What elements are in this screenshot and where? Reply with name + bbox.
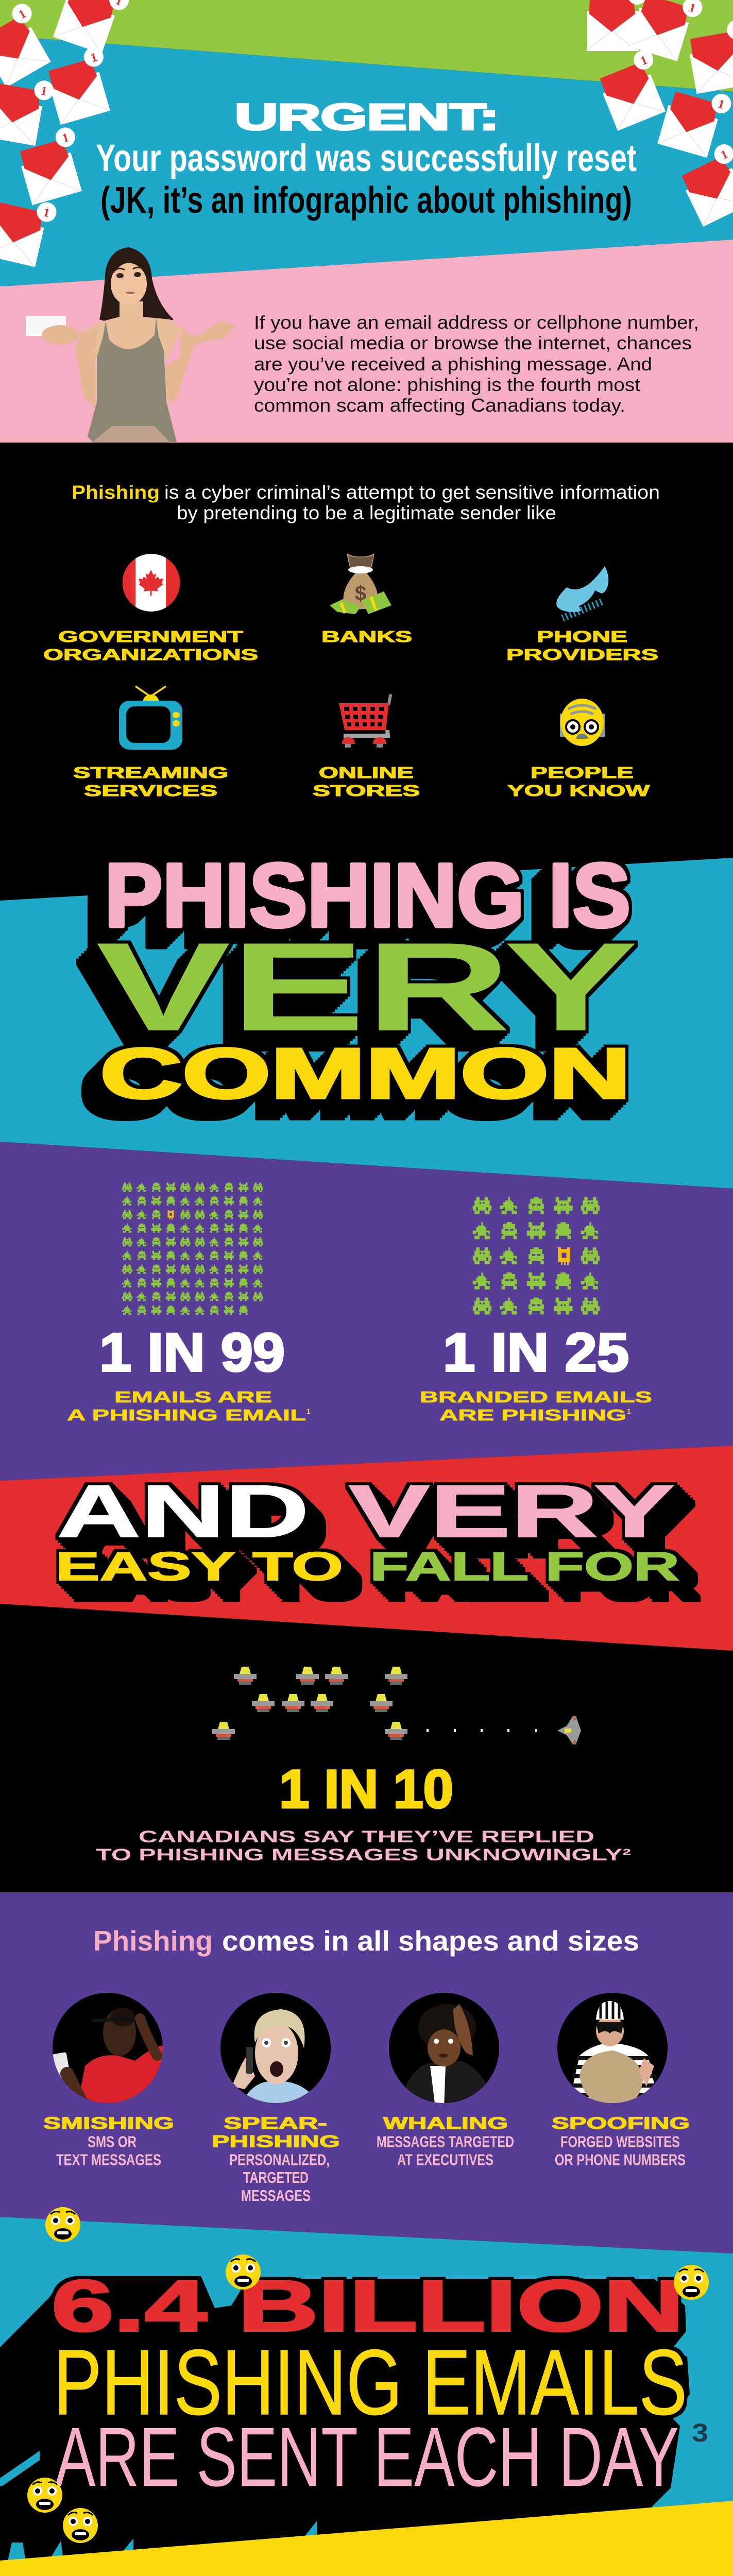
label: spoofing: SPOOFING — [552, 2114, 690, 2132]
panel: don't take the bait — [0, 2501, 733, 2576]
icon: television — [119, 686, 182, 750]
label: online stores: ONLINE — [319, 764, 414, 782]
label: spear-phishing — [212, 2114, 340, 2205]
caption: branded emails are phishing: BRANDED EMAILS — [420, 1388, 652, 1406]
heading: phishing definition: by pretending to be a legitimate sender like — [177, 502, 556, 523]
photo: smishing person — [52, 1993, 165, 2110]
icon: envelopes with notification badges: 1 — [42, 206, 51, 221]
title: URGENT: — [235, 97, 499, 138]
icon: money bag — [330, 553, 391, 614]
shadow behind headline — [0, 2276, 690, 2576]
heading: phishing comes in all shapes and sizes: Phishing — [93, 1925, 213, 1957]
heading: and very easy to fall for: EASY TO — [56, 1544, 343, 1589]
label: smishing: TEXT MESSAGES — [56, 2150, 161, 2169]
icon: surprised emoji — [45, 2207, 80, 2242]
icon: older man emoji — [560, 699, 605, 746]
icon: envelopes with notification badges: 1 — [16, 7, 28, 22]
label: whaling: AT EXECUTIVES — [397, 2150, 493, 2169]
icon: surprised emoji — [674, 2265, 709, 2300]
icon: surprised emoji — [226, 2255, 261, 2290]
text block: intro: are you’ve received a phishing message. And — [254, 353, 652, 375]
caption: emails are a phishing email: EMAILS ARE — [114, 1388, 272, 1406]
caption: branded emails are phishing: ARE PHISHING — [439, 1406, 626, 1424]
caption: branded emails are phishing — [420, 1388, 652, 1424]
panel: statistics — [0, 1142, 733, 1481]
heading: 6.4 billion phishing emails: 3 — [692, 2418, 708, 2447]
text block: intro: you’re not alone: phishing is the fourth most — [254, 374, 640, 395]
text block: intro — [254, 312, 699, 416]
icon: telephone handset — [556, 566, 608, 618]
heading: 6.4 billion phishing emails — [52, 2265, 708, 2504]
text block: intro: common scam affecting Canadians today. — [254, 395, 625, 416]
label: people you know — [507, 764, 650, 800]
caption: branded emails are phishing: 1 — [627, 1407, 631, 1415]
icon: envelopes with notification badges: 1 — [639, 54, 649, 68]
icon: woman shrugging with phone — [26, 247, 235, 443]
caption: emails are a phishing email: A PHISHING EMAIL — [67, 1406, 306, 1424]
label: online stores: STORES — [313, 782, 420, 800]
title — [96, 97, 637, 221]
label: government organizations: ORGANIZATIONS — [43, 646, 258, 664]
icon: envelopes with notification badges: 1 — [89, 50, 99, 65]
heading: 6.4 billion phishing emails: 6.4 BILLION — [52, 2265, 684, 2346]
heading: phishing definition: is a cyber criminal’s attempt to get sensitive information — [164, 482, 660, 503]
label: government organizations: GOVERNMENT — [58, 628, 243, 646]
label: people you know: PEOPLE — [531, 764, 634, 782]
heading: phishing is: PHISHING IS — [105, 845, 630, 946]
label: smishing: SMS OR — [88, 2133, 137, 2150]
label: streaming services: STREAMING — [73, 764, 228, 782]
panel: phishing is very common — [0, 845, 733, 1189]
icon: surprised emoji — [27, 2478, 62, 2513]
label: banks: BANKS — [321, 628, 412, 646]
panel: hero — [0, 0, 733, 443]
label: spoofing: FORGED WEBSITES — [560, 2133, 680, 2150]
label: phone providers — [506, 628, 658, 664]
heading: and very easy to fall for — [56, 1470, 679, 1589]
panel: 1 in 10 — [0, 1604, 733, 1892]
caption: canadians replied — [96, 1827, 631, 1864]
label: whaling: MESSAGES TARGETED — [377, 2133, 514, 2150]
icon: envelopes with notification badges: 1 — [717, 97, 726, 112]
chart: 1 in 25 invaders — [469, 1193, 604, 1319]
caption: canadians replied: CANADIANS SAY THEY’VE REPLIED — [139, 1827, 594, 1846]
label: spear-phishing: PHISHING — [212, 2132, 340, 2150]
caption: emails are a phishing email — [67, 1388, 311, 1424]
label: whaling — [377, 2114, 514, 2169]
label: spear-phishing: TARGETED — [243, 2168, 309, 2187]
icon: envelopes with notification badges: 1 — [687, 1, 697, 15]
text block: intro: If you have an email address or cellphone number, — [254, 312, 699, 333]
icon: shopping cart — [339, 696, 390, 748]
label: spear-phishing: PERSONALIZED, — [229, 2150, 330, 2169]
label: smishing — [43, 2114, 174, 2169]
heading: phishing definition: Phishing — [72, 482, 160, 503]
text block: intro: use social media or browse the internet, chances — [254, 332, 692, 353]
photo: whaling person — [389, 1993, 499, 2107]
heading: and very easy to fall for: VERY — [349, 1470, 675, 1553]
panel: phishing types — [0, 1892, 733, 2253]
label: spear-phishing: SPEAR- — [224, 2114, 327, 2132]
icon: envelopes with notification badges — [0, 0, 733, 269]
label: online stores — [313, 764, 420, 800]
icon: envelopes with notification badges: 1 — [719, 148, 730, 162]
label: streaming services — [73, 764, 228, 800]
icon: envelopes with notification badges: 1 — [61, 131, 71, 146]
icon: canada flag circle — [123, 554, 180, 612]
panel: what phishing is — [44, 485, 658, 796]
label: spoofing: OR PHONE NUMBERS — [555, 2150, 686, 2169]
heading: phishing comes in all shapes and sizes: comes in all shapes and sizes — [222, 1925, 639, 1957]
label: government organizations — [43, 628, 258, 664]
icon: surprised emoji — [63, 2508, 98, 2543]
heading: and very easy to fall for: AND — [57, 1470, 309, 1553]
icon: money bag: $ — [355, 582, 366, 605]
heading: and very easy to fall for: FALL FOR — [370, 1544, 679, 1589]
panel: easy to fall for — [0, 1446, 733, 1651]
label: whaling: WHALING — [383, 2114, 508, 2132]
caption: emails are a phishing email: 1 — [306, 1407, 311, 1415]
stat: 1 in 99: 1 IN 99 — [99, 1323, 285, 1383]
stat: 1 in 10: 1 IN 10 — [279, 1759, 453, 1820]
photo: spoofing person — [557, 1993, 668, 2110]
label: people you know: YOU KNOW — [507, 782, 650, 800]
label: phone providers: PROVIDERS — [506, 646, 658, 664]
heading: common: COMMON — [100, 1034, 631, 1113]
icon: envelopes with notification badges: 1 — [40, 84, 48, 98]
stat: 1 in 25: 1 IN 25 — [443, 1323, 629, 1383]
caption: canadians replied: TO PHISHING MESSAGES UNKNOWINGLY² — [96, 1845, 631, 1864]
chart: alien ships and player ship — [212, 1667, 581, 1744]
label: spoofing — [552, 2114, 690, 2169]
heading: very: VERY — [96, 916, 638, 1057]
label: phone providers: PHONE — [537, 628, 627, 646]
label: smishing: SMISHING — [43, 2114, 174, 2132]
heading: phishing definition — [72, 482, 660, 523]
label: streaming services: SERVICES — [84, 782, 217, 800]
photo: spear-phishing person — [220, 1993, 331, 2107]
panel: 6.4 billion — [0, 2207, 733, 2576]
chart: 1 in 99 invaders — [120, 1180, 265, 1317]
label: spear-phishing: MESSAGES — [241, 2187, 311, 2205]
